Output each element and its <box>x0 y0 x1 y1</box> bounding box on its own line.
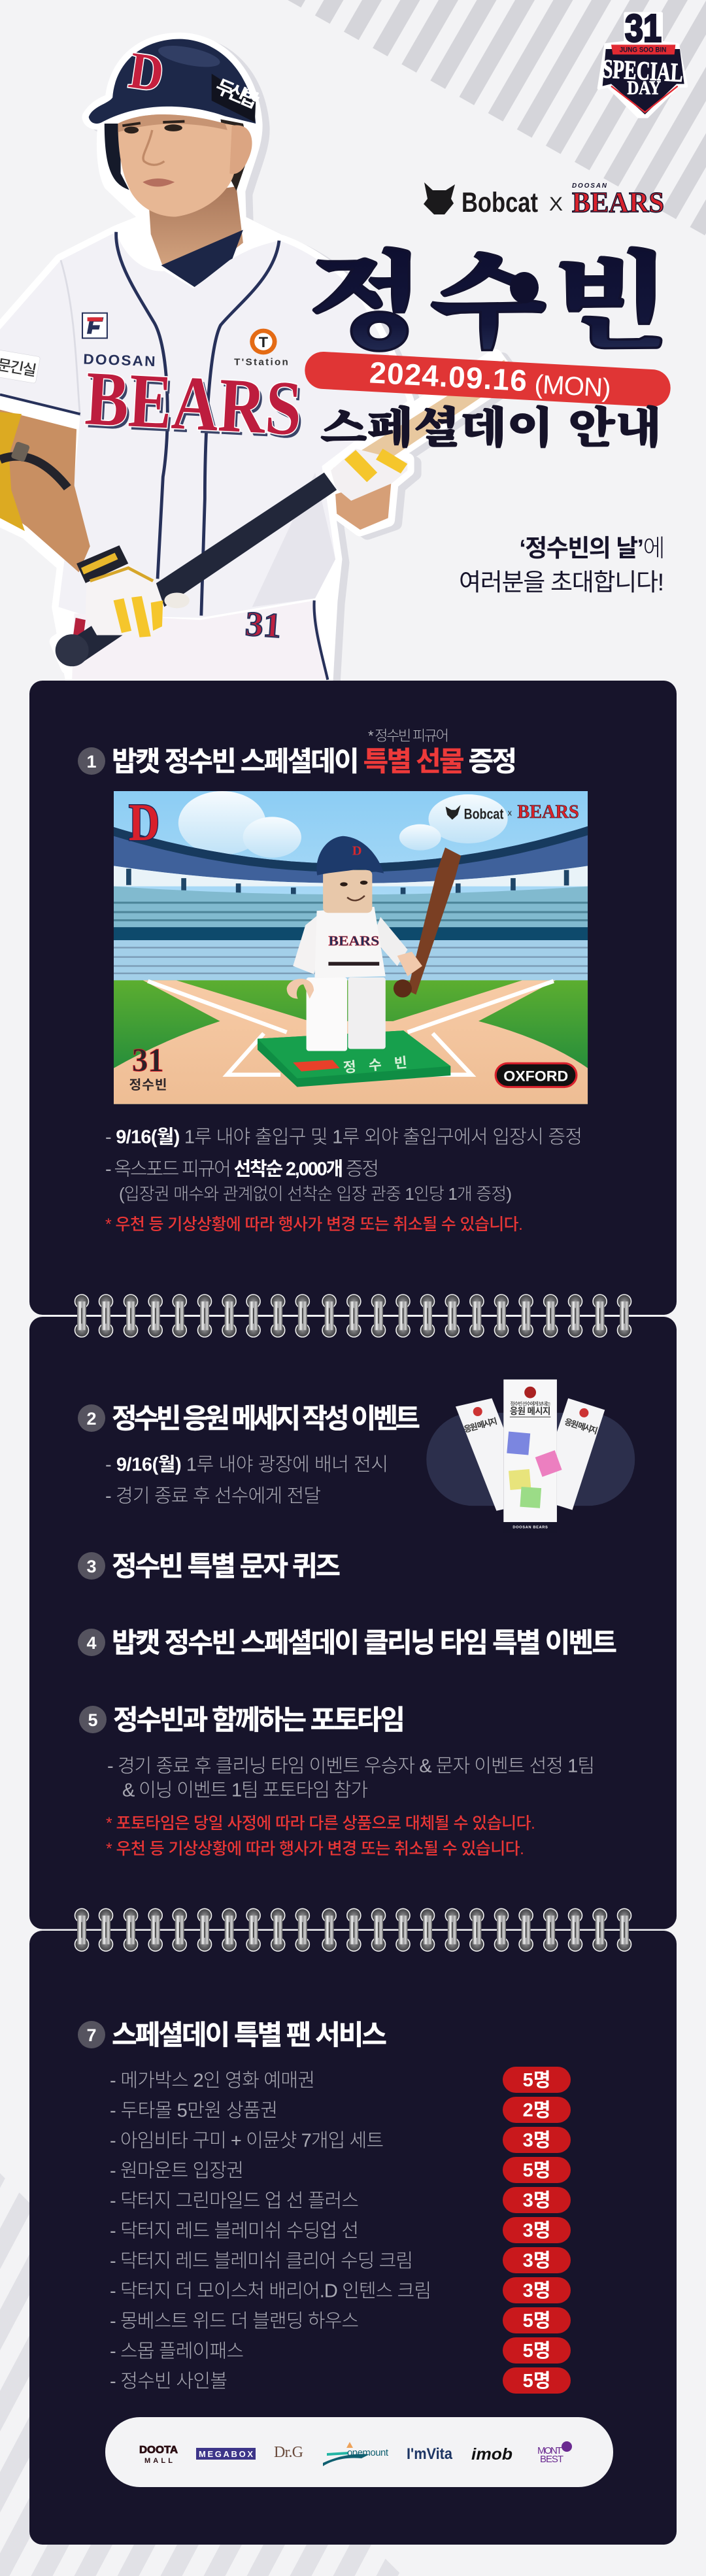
prize list: - 두타몰 5만원 상품권 <box>110 2100 278 2121</box>
date ribbon <box>304 350 671 408</box>
logo: Doota Mall <box>139 2445 178 2465</box>
invitation text: 여러분을 초대합니다! <box>459 569 664 596</box>
Bobcat x Bears logo: DOOSAN <box>572 182 607 190</box>
helmet <box>89 39 262 124</box>
logo: Mont Best: MONT <box>537 2445 562 2456</box>
logo: Doota Mall: MALL <box>144 2457 173 2465</box>
jersey logos: T'Station <box>234 358 288 367</box>
prize list: - 메가박스 2인 영화 예매권 <box>110 2070 315 2091</box>
logo: Dr.G: Dr.G <box>274 2444 303 2461</box>
minifigure: BEARS <box>328 933 379 949</box>
winner count pills: 5명 <box>523 2370 550 2392</box>
event 5: 정수빈과 함께하는 포토타임 <box>113 1704 405 1735</box>
illustration: message banners: 응원 메시지 <box>563 1417 599 1436</box>
illustration: message banners: DOOSAN BEARS <box>513 1526 548 1530</box>
pants: 31 <box>244 604 282 645</box>
event 5: - 경기 종료 후 클리닝 타임 이벤트 우승자 & 문자 이벤트 선정 1팀 <box>107 1756 595 1777</box>
event 2: 2 <box>86 1409 97 1429</box>
pants <box>72 600 328 680</box>
event 2: 정수빈 응원 메세지 작성 이벤트 <box>112 1403 420 1434</box>
illustration: message banners <box>426 1373 635 1533</box>
jersey <box>0 232 407 618</box>
Bobcat x Bears logo: X <box>549 194 563 215</box>
winner count pills: 5명 <box>523 2310 550 2331</box>
player photo cut-out <box>0 39 518 683</box>
jersey logos <box>0 313 307 455</box>
winner count pills: 2명 <box>523 2099 550 2121</box>
special day badge: 31 <box>625 6 662 50</box>
event 3: 정수빈 특별 문자 퀴즈 <box>112 1551 341 1582</box>
event 5: * 우천 등 기상상황에 따라 행사가 변경 또는 취소될 수 있습니다. <box>106 1840 524 1858</box>
prize list: - 아임비타 구미 + 이뮨샷 7개입 세트 <box>110 2130 384 2151</box>
jersey logos: BEARS <box>83 356 304 452</box>
jersey logos: DOOSAN <box>83 351 156 369</box>
winner count pills: 3명 <box>523 2190 550 2211</box>
corner logos: x <box>508 809 513 817</box>
event 5: * 포토타임은 당일 사정에 따라 다른 상품으로 대체될 수 있습니다. <box>106 1814 535 1833</box>
icon: bobcat head <box>424 182 455 214</box>
title: 정수빈: 정수빈 <box>307 216 670 371</box>
logo: Mont Best <box>537 2441 572 2465</box>
event details: (입장권 매수와 관계없이 선착순 입장 관중 1인당 1개 증정) <box>119 1184 512 1204</box>
prize list: - 몽베스트 위드 더 블랜딩 하우스 <box>110 2311 359 2331</box>
winner count pills: 3명 <box>523 2280 550 2301</box>
prize list: - 닥터지 그린마일드 업 선 플러스 <box>110 2190 359 2211</box>
jersey logos: BEARS <box>86 360 307 455</box>
prize list: - 원마운트 입장권 <box>110 2160 244 2181</box>
sponsor logo bar <box>105 2417 613 2487</box>
corner logos: BEARS <box>517 801 579 822</box>
number badge 7: 7 <box>86 2025 97 2045</box>
winner count pills: 5명 <box>523 2160 550 2181</box>
panel: events 2 to 5 <box>29 1317 677 1929</box>
corner logos: OXFORD <box>503 1068 568 1085</box>
special day badge: DAY <box>627 77 661 99</box>
Bobcat x Bears logo: BEARS <box>572 186 664 218</box>
minifigure: D <box>352 844 362 858</box>
winner count pills: 3명 <box>523 2250 550 2271</box>
event 2 <box>78 1403 420 1506</box>
head and face <box>105 114 252 217</box>
event 2: - 경기 종료 후 선수에게 전달 <box>105 1485 321 1506</box>
number badge 1 <box>78 747 105 775</box>
date ribbon: 2024.09.16 <box>369 355 528 398</box>
number badge 7 <box>78 2021 105 2048</box>
spiral binding: upper <box>75 1295 631 1337</box>
logo: I'mVita: I'mVita <box>407 2445 453 2463</box>
Bobcat x Bears logo: Bobcat <box>462 187 538 218</box>
corner logos: 31 <box>132 1042 163 1079</box>
display base <box>258 1030 450 1087</box>
winner count pills <box>503 2067 571 2394</box>
illustration: message banners: 응원 메시지 <box>463 1416 498 1434</box>
minifigure <box>287 836 461 1051</box>
event 5: 5 <box>88 1710 98 1730</box>
event details: - 옥스포드 피규어 선착순 2,000개 증정 <box>105 1159 379 1179</box>
logo: onemount: onemount <box>347 2447 389 2458</box>
winner count pills: 5명 <box>523 2340 550 2362</box>
figure caption: * 정수빈 피규어 <box>368 728 449 744</box>
jersey logos: T <box>259 334 268 350</box>
helmet: D <box>126 41 167 103</box>
right forearm and batting glove <box>331 449 407 530</box>
Bobcat x Bears logo <box>424 182 664 218</box>
event 3: 3 <box>86 1557 97 1576</box>
event 5 <box>79 1704 595 1858</box>
event 5: & 이닝 이벤트 1팀 포토타임 참가 <box>122 1780 368 1801</box>
prize list: - 닥터지 레드 블레미쉬 클리어 수딩 크림 <box>110 2250 413 2271</box>
event 4: 밥캣 정수빈 스페셜데이 클리닝 타임 특별 이벤트 <box>112 1627 617 1658</box>
spiral binding: lower <box>75 1908 631 1951</box>
prize list: - 닥터지 레드 블레미쉬 수딩업 선 <box>110 2220 359 2241</box>
logo: onemount <box>323 2442 389 2466</box>
logo: Megabox: MEGABOX <box>199 2449 253 2459</box>
prize list: - 닥터지 더 모이스처 배리어.D 인텐스 크림 <box>110 2280 431 2301</box>
subtitle: 스페셜데이 안내: 스페셜데이 안내 <box>320 393 662 455</box>
number badge 1: 1 <box>86 752 97 771</box>
event 4: 4 <box>86 1633 97 1653</box>
invitation text <box>459 535 664 596</box>
corner logos: Bobcat <box>464 805 504 822</box>
neck and undershirt <box>148 186 243 287</box>
left batting glove <box>76 545 190 637</box>
corner logos: 정수빈 <box>129 1077 167 1093</box>
illustration: message banners: 정수빈 선수에게 보내는 <box>510 1400 550 1406</box>
special day badge: JUNG SOO BIN <box>620 46 666 54</box>
corner logos: D <box>129 793 160 852</box>
heading 7: 스페셜데이 특별 팬 서비스 <box>112 2020 387 2050</box>
winner count pills: 5명 <box>523 2069 550 2091</box>
event details: - 9/16(월) 1루 내야 출입구 및 1루 외야 출입구에서 입장시 증정 <box>105 1126 582 1148</box>
prize list: - 정수빈 사인볼 <box>110 2371 227 2392</box>
helmet: 두산밥 <box>212 76 262 112</box>
left arm and elbow guard <box>0 410 90 572</box>
corner logos <box>129 793 579 1093</box>
special day badge <box>599 6 686 116</box>
logo: imob: imob <box>471 2445 513 2464</box>
winner count pills: 3명 <box>523 2129 550 2151</box>
event 2: - 9/16(월) 1루 내야 광장에 배너 전시 <box>105 1454 388 1475</box>
event details <box>105 1126 582 1234</box>
illustration: Oxford figure in stadium <box>114 791 588 1104</box>
date ribbon: (MON) <box>533 370 612 403</box>
bat <box>56 360 511 666</box>
invitation text: ‘정수빈의 날’에 <box>519 535 664 562</box>
event details: * 우천 등 기상상황에 따라 행사가 변경 또는 취소될 수 있습니다. <box>105 1215 523 1234</box>
winner count pills: 3명 <box>523 2220 550 2241</box>
illustration: message banners: 응원 메시지 <box>510 1406 550 1416</box>
panel: fan service <box>29 1931 677 2545</box>
prize list <box>110 2070 431 2392</box>
prize list: - 스몹 플레이패스 <box>110 2341 244 2362</box>
logo: Doota Mall: DOOTA <box>139 2445 178 2456</box>
panel: special gift <box>29 681 677 1315</box>
heading 1: 밥캣 정수빈 스페셜데이 특별 선물 증정 <box>112 746 517 777</box>
display base: 정수빈 <box>343 1054 420 1076</box>
logo: Mont Best: BEST <box>540 2454 563 2465</box>
